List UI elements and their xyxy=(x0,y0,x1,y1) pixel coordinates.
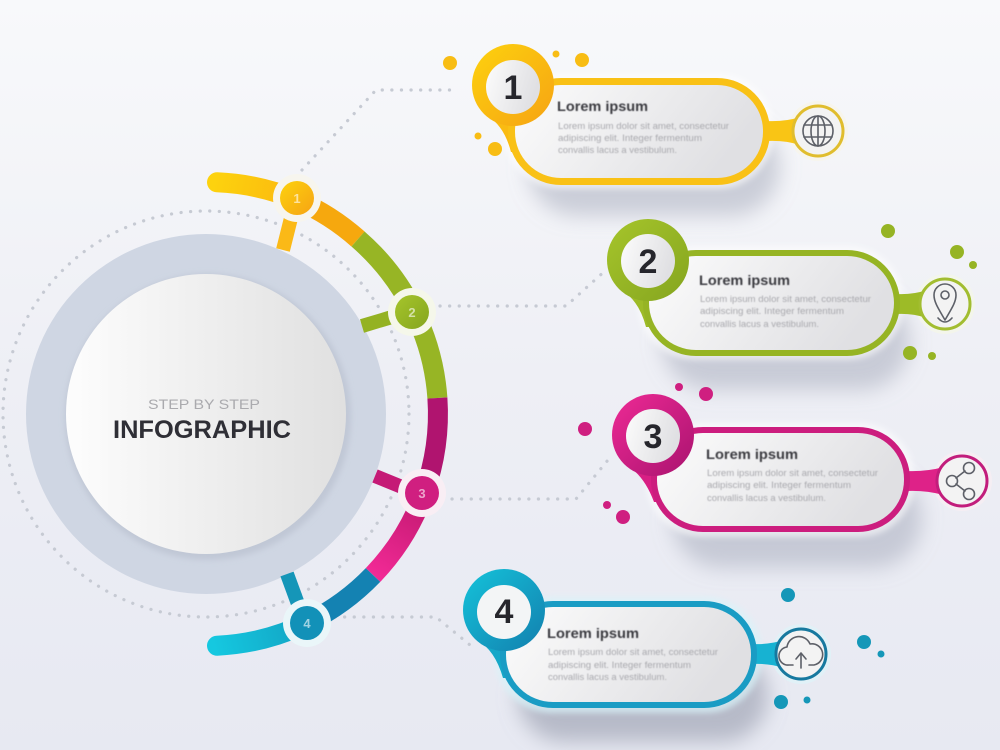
panel: step 1 xyxy=(472,44,848,216)
panel: step 2 xyxy=(607,219,975,390)
arc node 2 xyxy=(388,288,436,336)
central disc xyxy=(3,211,409,617)
number badge xyxy=(607,219,689,301)
segmented arc xyxy=(217,182,438,646)
number badge xyxy=(612,394,694,476)
number badge xyxy=(472,44,554,126)
tail and outer card xyxy=(477,637,531,678)
card body xyxy=(515,85,763,178)
card text xyxy=(557,99,729,155)
outer grey ring xyxy=(26,234,386,594)
card text xyxy=(706,447,878,503)
card text: Lorem ipsum xyxy=(706,447,798,462)
card text: convallis lacus a vestibulum. xyxy=(707,493,826,503)
arc stubs xyxy=(283,218,402,604)
arc node 4: 4 xyxy=(303,616,311,631)
panel: step 4: 4 xyxy=(495,593,514,631)
card text: Lorem ipsum dolor sit amet, consectetur xyxy=(548,647,718,657)
tail and outer card xyxy=(626,462,680,502)
card text: convallis lacus a vestibulum. xyxy=(558,145,677,155)
heading: INFOGRAPHIC xyxy=(113,416,291,444)
card body xyxy=(657,433,904,526)
connector xyxy=(752,640,784,668)
card text: convallis lacus a vestibulum. xyxy=(548,672,667,682)
arc node 1 xyxy=(273,174,321,222)
tail and outer card xyxy=(486,112,540,152)
card text: Lorem ipsum xyxy=(557,99,648,114)
arc node 3: 3 xyxy=(418,486,426,501)
arc node 4 xyxy=(283,599,331,647)
panel: step 4 xyxy=(463,569,831,742)
panel: step 2: 2 xyxy=(639,243,657,281)
number badge xyxy=(463,569,545,651)
tail and outer card xyxy=(621,287,675,327)
card text: adipiscing elit. Integer fermentum xyxy=(707,480,851,490)
connector xyxy=(896,290,927,318)
arc node 1: 1 xyxy=(293,191,301,206)
card text: Lorem ipsum dolor sit amet, consectetur xyxy=(558,121,729,131)
panel: step 3 xyxy=(612,394,992,568)
card text: Lorem ipsum xyxy=(547,626,639,641)
dotted connector lines xyxy=(302,90,608,645)
card text xyxy=(699,273,871,329)
icon: map pin xyxy=(920,279,970,329)
card text: adipiscing elit. Integer fermentum xyxy=(700,306,844,316)
card body xyxy=(649,256,894,350)
connector xyxy=(766,117,800,145)
card text: Lorem ipsum dolor sit amet, consectetur xyxy=(707,468,878,478)
icon: globe xyxy=(793,106,843,156)
panel: step 3: 3 xyxy=(644,418,662,456)
icon: share xyxy=(937,456,987,506)
arc node 2: 2 xyxy=(408,305,416,320)
card text: adipiscing elit. Integer fermentum xyxy=(548,660,691,670)
subtitle: STEP BY STEP xyxy=(148,396,260,412)
card text xyxy=(547,626,718,682)
icon: cloud upload xyxy=(776,629,826,679)
decorative dots xyxy=(443,50,977,709)
card text: convallis lacus a vestibulum. xyxy=(700,319,819,329)
inner white disc xyxy=(66,274,346,554)
connector xyxy=(906,467,944,495)
card text: adipiscing elit. Integer fermentum xyxy=(558,133,702,143)
arc node 3 xyxy=(398,469,446,517)
card text: Lorem ipsum xyxy=(699,273,790,288)
card body xyxy=(506,607,751,702)
card text: Lorem ipsum dolor sit amet, consectetur xyxy=(700,294,871,304)
panel: step 1: 1 xyxy=(504,69,522,107)
